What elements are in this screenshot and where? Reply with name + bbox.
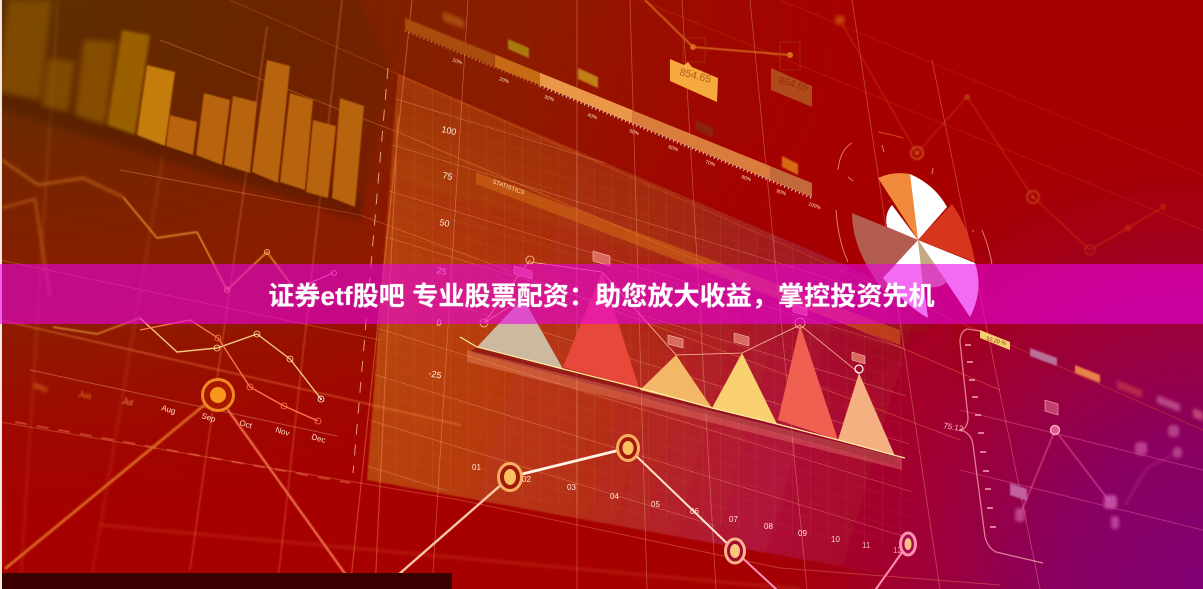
top ruler bar (405, 18, 822, 211)
month labels: Sep (200, 411, 217, 424)
line chart: red series (140, 320, 321, 424)
x axis numbers: 05 (651, 500, 660, 509)
top ruler bar: 10% (451, 57, 463, 66)
callout: 854.65 bright (670, 59, 718, 102)
top ruler bar: 100% (807, 201, 822, 211)
pie chart (836, 132, 992, 318)
month labels: Nov (274, 425, 291, 438)
dashed axis: horizontal (15, 422, 350, 483)
top ruler bar: 30% (543, 94, 555, 103)
top ruler bar: 80% (740, 174, 752, 183)
line chart: faded top-right series (835, 15, 1166, 255)
x axis numbers: 08 (764, 522, 773, 531)
bottom dark bar (2, 573, 452, 589)
dashed axis: vertical (353, 68, 388, 473)
left edge strip (0, 0, 2, 589)
triangle chart: value flags (514, 251, 865, 364)
x axis numbers: 10 (831, 535, 840, 544)
top ruler bar: 70% (704, 159, 716, 168)
y axis labels: 50 (439, 217, 450, 229)
bracket label: 75:12 (943, 421, 964, 434)
y axis labels: 0 (436, 317, 443, 328)
x axis numbers: 03 (567, 483, 576, 492)
month labels: Aug (160, 403, 177, 416)
y axis labels: 75 (442, 170, 453, 182)
x axis numbers: 04 (610, 492, 619, 501)
triangle chart: shadow and base band (467, 347, 902, 470)
top ruler bar: 60% (667, 144, 679, 153)
x axis numbers: 09 (798, 529, 807, 538)
callout: 854.65 dim: 854.65 (777, 75, 810, 94)
line: large node connections (6, 402, 908, 589)
month labels: Dec (310, 432, 327, 445)
x axis numbers: 07 (729, 515, 738, 524)
callout: 854.65 bright: 854.65 (678, 66, 712, 86)
line: top nodes (645, 0, 800, 70)
bracket panel (960, 329, 1043, 563)
y axis labels: 100 (441, 124, 457, 137)
statistics band: STATISTICS (491, 179, 525, 196)
top ruler bar: 20% (498, 76, 510, 85)
panel: lit chart area (367, 74, 965, 589)
small ruler flags (443, 11, 798, 175)
x axis numbers: 02 (522, 475, 531, 484)
line chart: right blurred series (1010, 400, 1182, 529)
top ruler bar: 40% (586, 112, 598, 121)
callout: 854.65 dim (771, 68, 812, 107)
statistics band (476, 172, 900, 345)
month labels: Oct (238, 418, 254, 431)
icon: chart nodes (498, 436, 916, 563)
y axis labels (428, 124, 457, 381)
top ruler bar: 50% (628, 128, 640, 137)
x axis numbers (472, 463, 902, 555)
banner (0, 264, 1203, 324)
triangle chart: connecting line (480, 256, 863, 373)
month labels: May (32, 381, 49, 394)
x axis numbers: 11 (862, 541, 871, 550)
line chart: faded left series (2, 199, 50, 297)
top ruler bar: 90% (775, 188, 787, 197)
line chart: pale yellow series (53, 318, 324, 402)
y axis labels: 25 (436, 265, 447, 277)
month labels (32, 381, 327, 445)
title: 证券etf股吧 专业股票配资：助您放大收益，掌控投资先机 (268, 281, 935, 311)
line chart: small upper segment (224, 250, 336, 292)
right flags row (980, 330, 1203, 421)
x axis numbers: 01 (472, 463, 481, 472)
month labels: Jul (121, 396, 134, 408)
right flags row: 52.20 % (985, 336, 1007, 347)
month labels: Jun (77, 389, 92, 401)
x axis numbers: 06 (690, 507, 699, 516)
x axis numbers: 12 (893, 546, 902, 555)
bar chart: blurred top-left bars (0, 0, 364, 222)
line chart: orange series (2, 160, 293, 290)
y axis labels: -25 (428, 368, 442, 381)
triangle chart: peaks (460, 272, 905, 458)
icon: large orange node (202, 380, 234, 410)
